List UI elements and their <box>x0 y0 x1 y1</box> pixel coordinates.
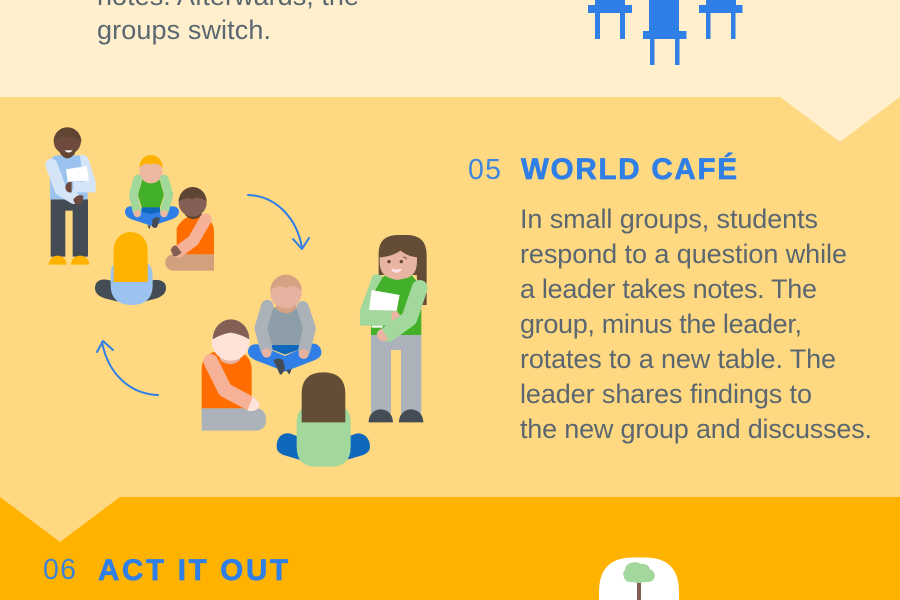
text block: world cafe description: a leader takes notes. The <box>520 274 817 304</box>
text block: world cafe description <box>520 204 872 444</box>
illustration: right group <box>202 235 427 467</box>
illustration: left group <box>49 127 214 305</box>
heading: act it out: ACT IT OUT <box>98 554 288 587</box>
panel: section 05 background <box>0 97 900 542</box>
heading: world cafe: WORLD CAFÉ <box>521 152 737 186</box>
icon: chairs <box>588 0 742 65</box>
heading: act it out: 06 <box>43 554 76 586</box>
text block: world cafe description: rotates to a new table. The <box>520 344 836 374</box>
figure: seated child in green <box>125 155 179 229</box>
figure: standing man <box>49 127 96 265</box>
text block: world cafe description: group, minus the leader, <box>520 309 802 339</box>
figure: seated person in orange <box>165 187 214 271</box>
text block: section 04 description <box>97 0 359 45</box>
panel: section 04 background <box>0 0 900 142</box>
arrow: bottom rotation <box>97 341 158 395</box>
icon: tree in cloud <box>599 558 679 600</box>
figure: seated person in orange shirt <box>202 319 266 431</box>
figure: seated person from behind, green top <box>277 372 370 467</box>
figure: seated person from behind, blue top <box>95 232 166 305</box>
text block: world cafe description: In small groups, students <box>520 204 818 234</box>
text block: world cafe description: leader shares findings to <box>520 379 812 409</box>
panel: section 06 background <box>0 497 900 600</box>
text block: world cafe description: respond to a question while <box>520 239 847 269</box>
text block: world cafe description: the new group and discusses. <box>520 414 872 444</box>
figure: standing woman with notes <box>360 235 427 422</box>
arrow: top rotation <box>248 195 309 249</box>
text block: section 04 description: groups switch. <box>97 15 271 45</box>
heading: world cafe: 05 <box>468 154 501 186</box>
figure: seated person in grey <box>248 275 321 375</box>
